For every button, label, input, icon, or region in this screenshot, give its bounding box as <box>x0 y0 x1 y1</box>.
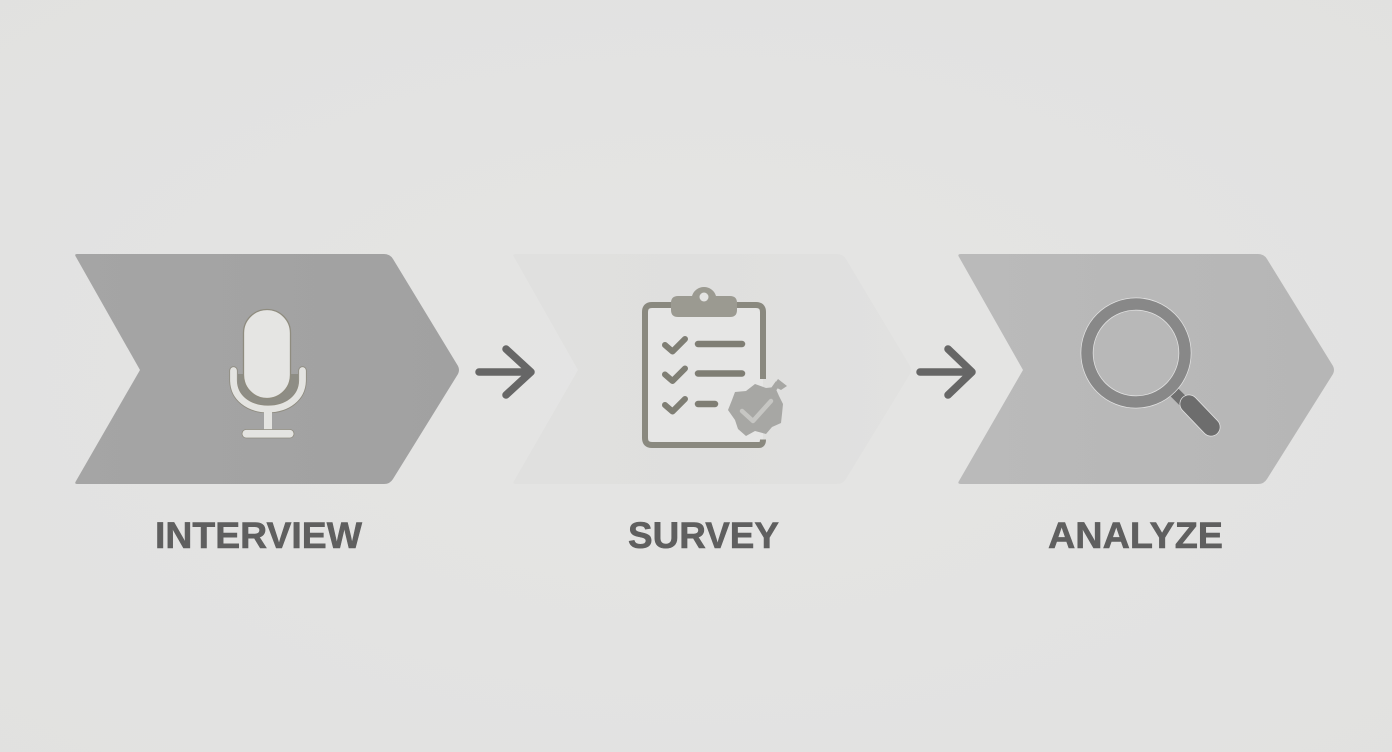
arrow: interview to survey <box>479 349 531 395</box>
label: survey: SURVEY <box>628 514 779 556</box>
step 3: analyze <box>958 254 1334 556</box>
chevron: survey <box>513 254 911 484</box>
label: interview: INTERVIEW <box>155 514 363 556</box>
icon: microphone <box>234 310 302 438</box>
step 2: survey <box>513 254 911 556</box>
step 1: interview <box>75 254 459 556</box>
icon: clipboard checklist <box>645 287 787 445</box>
chevron: analyze <box>958 254 1334 484</box>
icon: magnifying glass <box>1081 298 1211 427</box>
label: analyze: ANALYZE <box>1048 514 1223 556</box>
icon: badge <box>728 379 787 436</box>
arrow: survey to analyze <box>920 349 972 395</box>
chevron: interview <box>75 254 459 484</box>
